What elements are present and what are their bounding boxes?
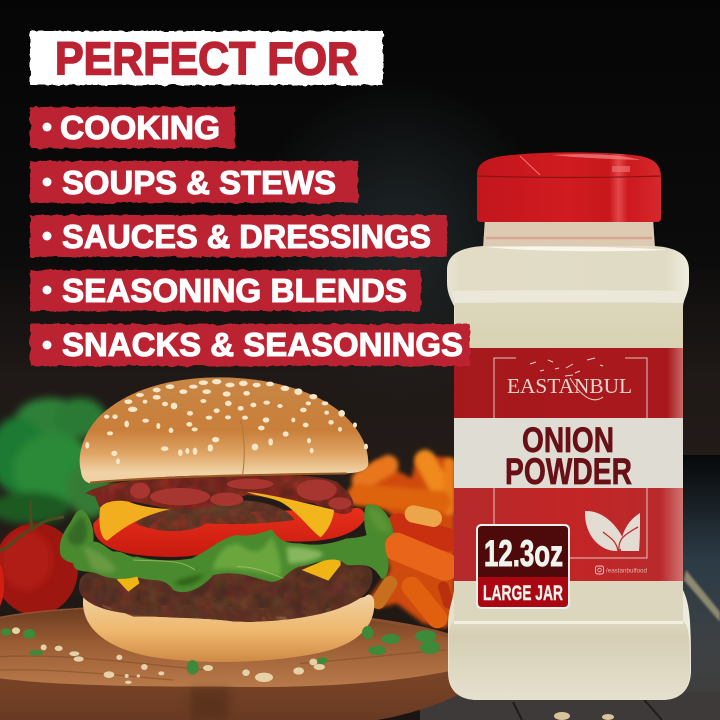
sweet potato fries	[353, 456, 455, 628]
crumbs and herbs on board	[1, 626, 440, 684]
top bun	[80, 377, 368, 483]
product name: ONION	[522, 421, 614, 460]
jar neck	[483, 218, 655, 248]
size badge	[476, 524, 570, 609]
item: cooking	[30, 107, 235, 148]
jar cap	[477, 152, 661, 222]
background greens	[0, 398, 112, 524]
lettuce	[60, 504, 393, 592]
tomato slice	[93, 508, 365, 557]
crumbs on table	[554, 712, 614, 720]
cheese low	[117, 553, 341, 592]
label bottom red band	[454, 488, 683, 581]
heading: perfect for: PERFECT FOR	[55, 32, 358, 84]
social handle: /eastanbulfood	[606, 568, 647, 574]
item: snacks and seasonings: SNACKS & SEASONINGS	[62, 326, 463, 363]
jar base	[449, 621, 690, 700]
burger	[60, 377, 393, 662]
cutting board	[0, 605, 458, 720]
bottom patty	[79, 561, 373, 622]
product name	[505, 421, 632, 492]
social handle	[596, 566, 647, 574]
upper patty	[135, 500, 295, 531]
label top red band	[454, 348, 683, 418]
product name: POWDER	[505, 451, 632, 492]
sesame seeds	[85, 379, 368, 464]
item: sauces and dressings: SAUCES & DRESSINGS	[62, 218, 431, 255]
chili topping	[85, 475, 353, 514]
bottom bun	[83, 594, 374, 662]
brand logo: EASTANBUL	[507, 374, 632, 398]
background tomatoes	[0, 500, 78, 615]
size badge: LARGE JAR	[483, 582, 563, 605]
panel: perfect for list	[30, 31, 470, 366]
label white band	[454, 418, 683, 488]
icon: leaves	[585, 511, 640, 551]
size badge: 12.3oz	[484, 533, 563, 574]
item: cooking: COOKING	[60, 109, 220, 146]
item: soups and stews: SOUPS & STEWS	[62, 164, 336, 201]
brand logo	[507, 358, 632, 400]
jar body	[447, 246, 691, 700]
cheese slices	[99, 501, 170, 541]
jar	[447, 152, 691, 700]
item: seasoning blends: SEASONING BLENDS	[62, 272, 407, 309]
powder fill	[455, 303, 683, 349]
